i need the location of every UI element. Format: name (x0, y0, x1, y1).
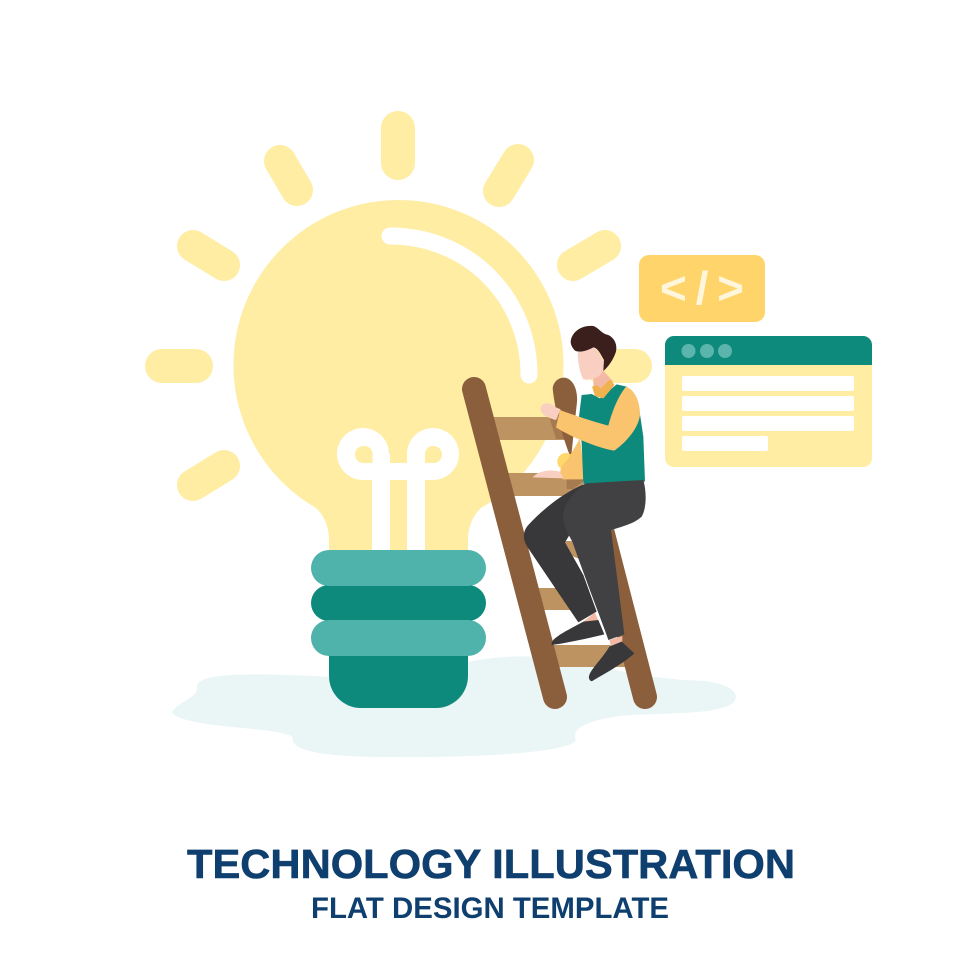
head (578, 347, 611, 380)
title: TECHNOLOGY ILLUSTRATION (187, 841, 795, 887)
brown tool (553, 378, 577, 458)
neck (593, 370, 613, 395)
bulb filament (337, 428, 459, 552)
ladder (474, 389, 645, 697)
lightbulb rays (162, 128, 635, 485)
near sleeve (556, 387, 640, 451)
far arm (560, 438, 585, 479)
rung shading (549, 418, 587, 489)
ground shadow (172, 656, 736, 757)
near hand (541, 403, 561, 420)
vest (579, 384, 645, 484)
near shoe (589, 642, 634, 681)
collar (592, 379, 615, 398)
subtitle: FLAT DESIGN TEMPLATE (311, 892, 669, 925)
yellow accent (557, 453, 575, 470)
browser window (665, 336, 872, 467)
far leg (524, 483, 597, 622)
bulb screw base (311, 550, 486, 708)
code tag badge (639, 255, 765, 322)
bulb highlight (390, 236, 529, 375)
code tag badge: </> (660, 262, 744, 314)
lightbulb glass (233, 200, 564, 556)
man on ladder: upper body (533, 326, 645, 489)
man on ladder: legs and shoes (524, 480, 646, 681)
far hand (533, 470, 563, 478)
hair (571, 326, 616, 371)
ankles (583, 612, 622, 647)
near leg (563, 480, 646, 640)
far shoe (552, 620, 604, 645)
